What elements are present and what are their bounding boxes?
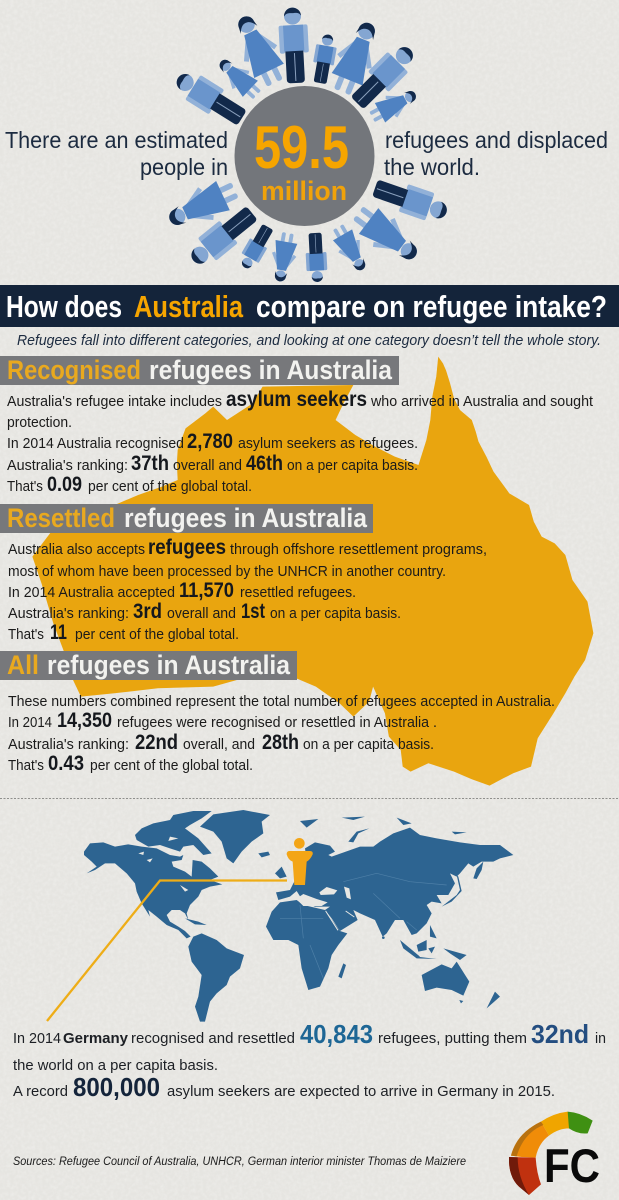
text block: recognised: That's [7,479,43,495]
text block: resettled: 3rd [133,600,162,623]
text block: recognised: 46th [246,452,283,475]
map: Americas and Greenland [84,810,270,1022]
text block: resettled: Australia also accepts [8,542,145,558]
text block: Germany: 32nd [531,1019,589,1049]
text block: all: Australia's ranking: [8,737,129,753]
text block: resettled: through offshore resettlement programs, [230,542,487,558]
icon: woman lower right [347,199,426,271]
text block: recognised: Australia's refugee intake includes [7,394,222,410]
icon: boy bottom [305,232,328,283]
intro text right: refugees and displaced [385,127,608,153]
icon: boy top [310,33,339,85]
text block: all: That's [8,758,44,774]
icon: man top [278,7,310,84]
text block: all: refugees were recognised or resettled in Australia . [117,715,437,731]
panel: recognised refugees [0,355,593,496]
text block: Germany: refugees, putting them [378,1030,527,1047]
text block: all: 14,350 [57,709,112,732]
text block: Germany: A record [13,1083,68,1100]
text block: recognised: asylum seekers as refugees. [238,436,418,452]
intro text right [384,127,608,180]
text block: resettled: most of whom have been processed by the UNHCR in another country. [8,564,446,580]
heading: resettled: refugees in Australia [124,503,367,533]
icon: man upper left [170,66,250,130]
heading: recognised [0,355,399,385]
icon: man lower right [370,174,451,226]
panel: all refugees [0,650,555,775]
heading: recognised: Recognised [7,355,141,385]
icon: girl upper right [366,83,421,128]
text block: all: These numbers combined represent the total number of refugees accepted in Australia. [8,694,555,710]
sources: Sources: Refugee Council of Australia, UNHCR, German interior minister Thomas de Maiziere [13,1156,466,1168]
grey circle with figure: million [261,176,347,206]
grey circle with figure [234,86,374,226]
icon: woman top right [325,16,387,99]
icon: woman lower left [162,174,243,237]
text block: all: In 2014 [8,715,52,731]
circle of people illustration [162,7,451,283]
text block: recognised: 0.09 [47,473,82,496]
text block: recognised: per cent of the global total. [88,479,252,495]
heading: recognised: refugees in Australia [149,355,392,385]
intro text right: the world. [384,154,480,180]
map: Eurasia, Africa and Oceania [266,817,513,1008]
text block: Germany: asylum seekers are expected to arrive in Germany in 2015. [167,1083,555,1100]
heading: resettled [0,503,373,533]
text block: Germany [13,1019,606,1102]
text block: recognised [7,388,593,496]
text block: all [8,694,555,775]
title banner: How does [6,289,122,324]
icon: girl upper left [213,52,265,104]
panel: resettled refugees [0,503,487,644]
icon: man lower left [184,202,261,272]
icon: orange person over Germany [287,838,313,885]
intro text left: There are an estimated [5,127,228,153]
text block: resettled: In 2014 Australia accepted [8,585,175,601]
text block: all: on a per capita basis. [303,737,434,753]
text block: resettled: 11,570 [179,579,234,602]
text block: Germany: In 2014 [13,1030,61,1047]
text block: recognised: Australia's ranking: [7,458,128,474]
text block: recognised: protection. [7,415,72,431]
intro text left [5,127,228,180]
text block: Germany: 800,000 [73,1072,160,1102]
text block: all: 22nd [135,731,178,754]
text block: resettled: overall and [167,606,236,622]
Australia map [32,357,593,786]
text block: all: per cent of the global total. [90,758,253,774]
text block: recognised: 37th [131,452,169,475]
text block: resettled: 1st [241,600,265,623]
text block: Germany: the world on a per capita basis. [13,1057,218,1074]
logo: FC gauge: FC [544,1139,600,1192]
text block: resettled: That's [8,627,44,643]
text block: Germany: recognised and resettled [131,1030,295,1047]
icon: man upper right [347,39,421,113]
grey circle with figure: 59.5 [254,114,349,181]
text block: Germany: 40,843 [300,1019,373,1049]
text block: recognised: In 2014 Australia recognised [7,436,184,452]
text block: recognised: 2,780 [187,430,233,453]
title banner [0,285,619,327]
text block: all: 28th [262,731,299,754]
intro text left: people in [140,154,228,180]
text block: Germany: Germany [63,1030,129,1047]
heading: all: refugees in Australia [47,650,290,680]
text block: all: 0.43 [48,752,84,775]
text block: resettled: per cent of the global total. [75,627,239,643]
callout line [47,880,287,1021]
heading: all: All [7,650,39,680]
text block: resettled: Australia's ranking: [8,606,129,622]
text block: Germany: in [595,1030,606,1047]
text block: all: overall, and [183,737,255,753]
text block: recognised: on a per capita basis. [287,458,418,474]
icon: girl lower right [327,221,373,276]
text block: resettled: refugees [148,536,226,559]
logo: FC gauge [509,1112,600,1195]
icon: boy lower left [236,222,277,272]
text block: resettled: resettled refugees. [240,585,356,601]
text block: recognised: overall and [173,458,242,474]
world map [84,810,513,1022]
text block: resettled: on a per capita basis. [270,606,401,622]
title banner: Australia [134,289,244,324]
icon: woman top left [226,9,292,91]
text block: recognised: who arrived in Australia and sought [370,394,593,410]
icon: girl bottom [267,231,300,283]
heading: resettled: Resettled [7,503,115,533]
text block: resettled [8,536,487,644]
text block: recognised: asylum seekers [226,388,367,411]
text block: resettled: 11 [50,621,67,644]
